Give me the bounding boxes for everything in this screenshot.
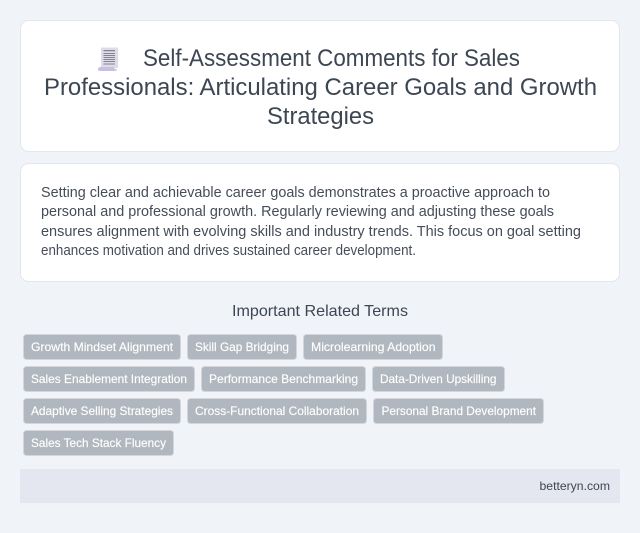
panel: title card <box>20 20 620 152</box>
tag <box>374 398 544 424</box>
title: Strategies <box>267 103 374 130</box>
footer <box>20 469 620 503</box>
title <box>44 45 597 130</box>
tag <box>24 366 194 392</box>
description text <box>41 185 581 259</box>
title: Self-Assessment Comments for Sales <box>143 45 520 72</box>
tag <box>188 334 296 360</box>
description text: ensures alignment with evolving skills and industry trends. This focus on goal setting <box>41 224 581 240</box>
tag: Adaptive Selling Strategies <box>31 404 173 418</box>
tag <box>24 398 180 424</box>
tag <box>372 366 504 392</box>
tag: Sales Enablement Integration <box>31 372 187 386</box>
tag <box>24 430 174 456</box>
tag: Microlearning Adoption <box>311 340 436 354</box>
tag: Personal Brand Development <box>382 404 537 418</box>
description text: personal and professional growth. Regularly reviewing and adjusting these goals <box>41 204 554 220</box>
title: Professionals: Articulating Career Goals and Growth <box>44 74 597 101</box>
tag <box>24 334 180 360</box>
tag: Sales Tech Stack Fluency <box>31 436 166 450</box>
tag: Skill Gap Bridging <box>195 340 289 354</box>
tag list <box>24 334 544 456</box>
tag <box>188 398 366 424</box>
heading: important related terms: Important Related Terms <box>232 303 408 320</box>
tag: Performance Benchmarking <box>209 372 358 386</box>
icon: paper scroll <box>98 48 118 71</box>
description text: enhances motivation and drives sustained career development. <box>41 243 416 259</box>
description text: Setting clear and achievable career goals demonstrates a proactive approach to <box>41 185 550 201</box>
tag <box>304 334 442 360</box>
tag: Growth Mindset Alignment <box>31 340 174 354</box>
footer text: betteryn.com <box>540 479 610 493</box>
tag: Data-Driven Upskilling <box>380 372 496 386</box>
tag <box>202 366 366 392</box>
tag: Cross-Functional Collaboration <box>195 404 359 418</box>
panel: description <box>20 164 620 282</box>
